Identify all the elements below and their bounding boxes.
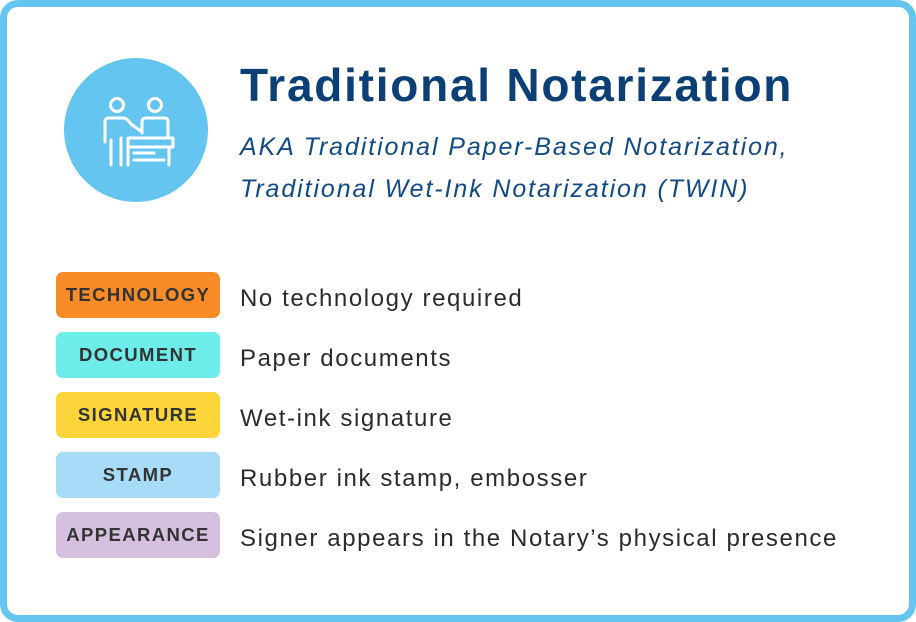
badge: stamp: STAMP xyxy=(103,464,173,485)
subtitle: Traditional Wet-Ink Notarization (TWIN) xyxy=(240,175,749,203)
text: technology: No technology required xyxy=(240,285,523,312)
badge: signature: SIGNATURE xyxy=(78,404,198,425)
badge: technology xyxy=(56,272,220,318)
badge: document xyxy=(56,332,220,378)
text: stamp: Rubber ink stamp, embosser xyxy=(240,465,588,492)
title: Traditional Notarization xyxy=(240,59,793,111)
subtitle xyxy=(238,133,789,203)
text: signature: Wet-ink signature xyxy=(240,405,454,432)
text: document: Paper documents xyxy=(240,345,452,372)
badge: signature xyxy=(56,392,220,438)
subtitle: AKA Traditional Paper-Based Notarization, xyxy=(240,133,789,161)
badge: stamp xyxy=(56,452,220,498)
icon: notary desk xyxy=(64,58,208,202)
badge: technology: TECHNOLOGY xyxy=(66,284,210,305)
badge: document: DOCUMENT xyxy=(79,344,197,365)
badge: appearance xyxy=(56,512,220,558)
badge: appearance: APPEARANCE xyxy=(66,524,210,545)
text: appearance: Signer appears in the Notary’s physical presence xyxy=(240,525,838,552)
